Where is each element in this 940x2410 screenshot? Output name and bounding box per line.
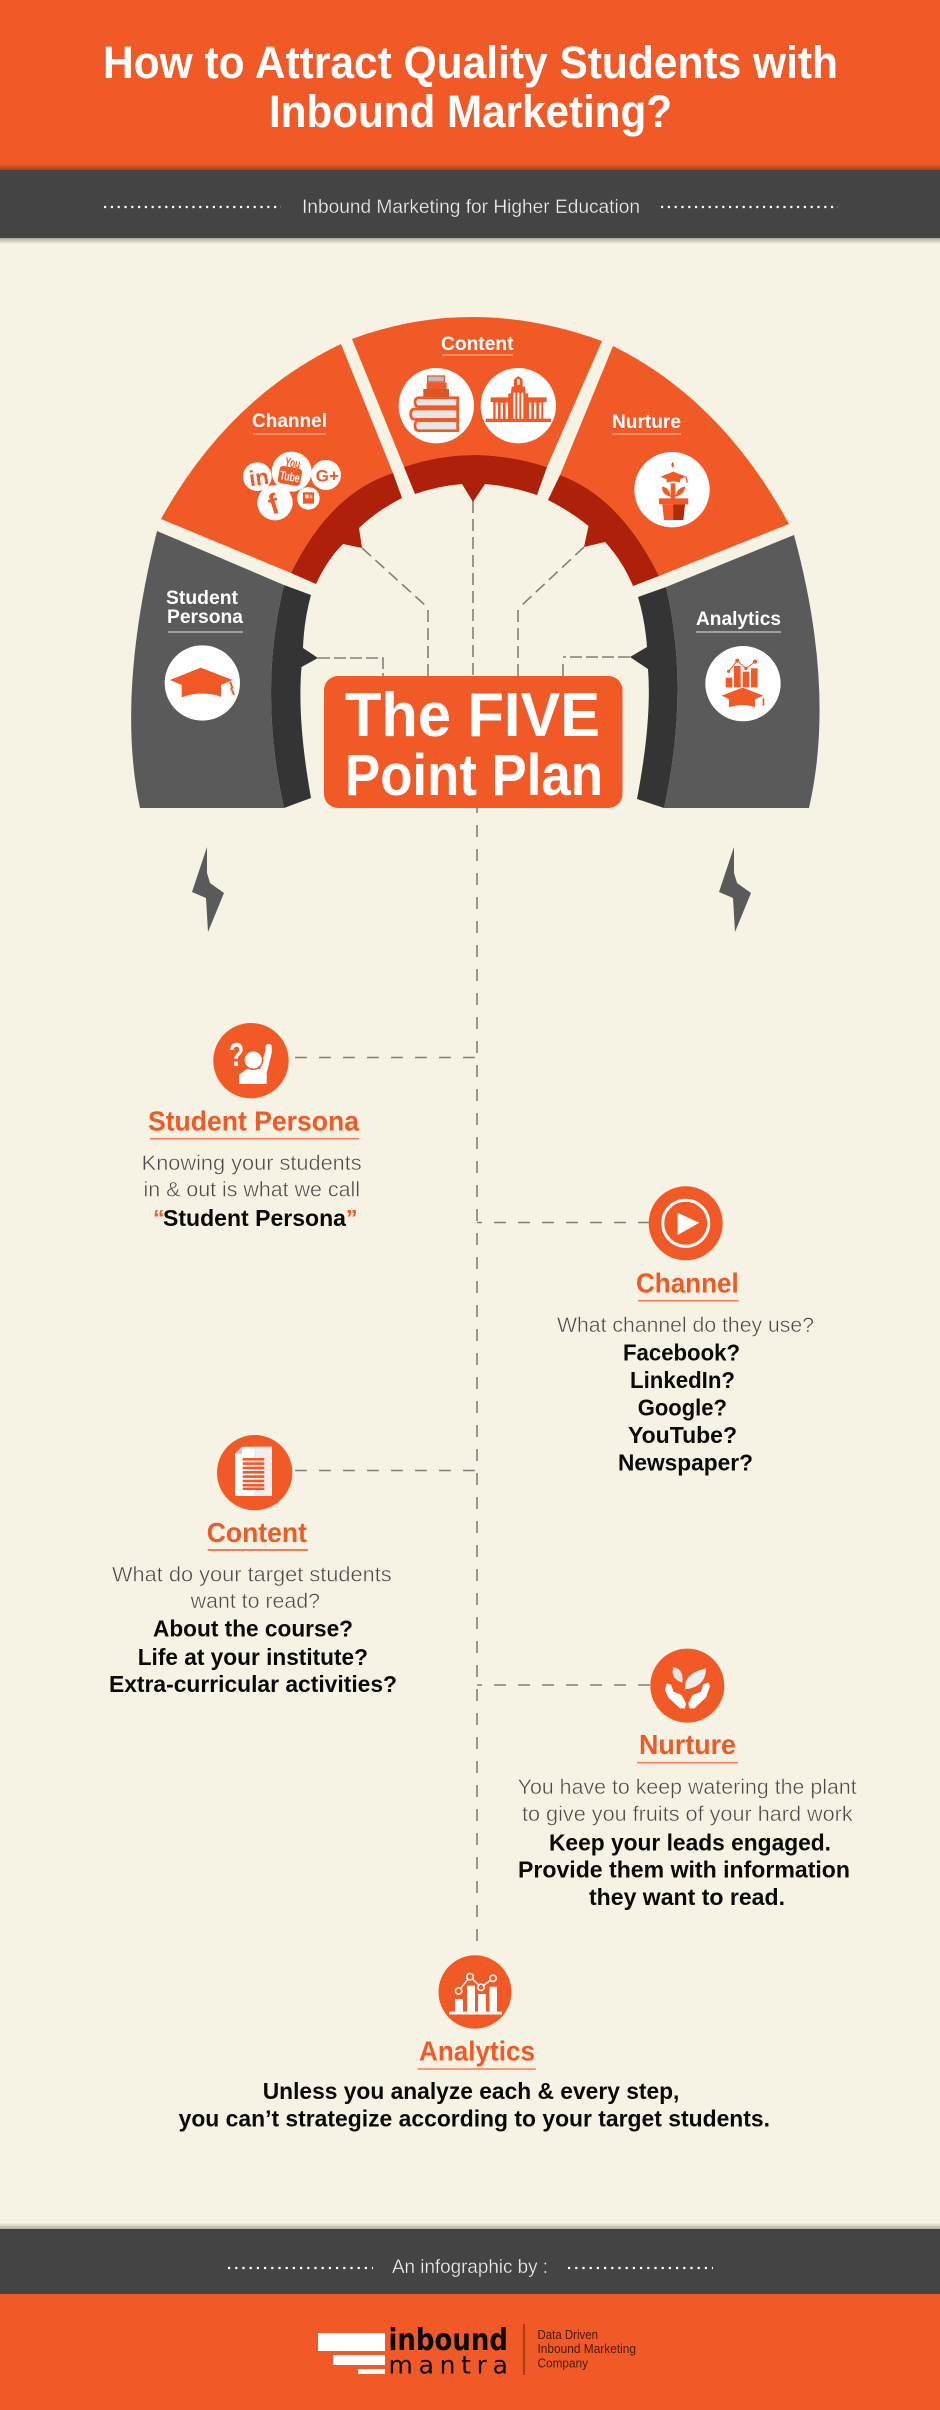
icon: graduation cap (165, 645, 240, 721)
text: content description: want to read? (190, 1590, 320, 1613)
tagline: Company (538, 2356, 588, 2370)
tagline: Data Driven (538, 2327, 598, 2342)
connector dashes: arch to plan box (318, 501, 630, 676)
text: nurture description: Keep your leads engaged. (549, 1830, 831, 1856)
text: student persona description: in & out is what we call (144, 1179, 360, 1202)
text: content description: What do your target students (112, 1564, 392, 1587)
text: channel description: YouTube? (628, 1422, 737, 1448)
credit bar: An infographic by : (392, 2256, 548, 2278)
logo: inbound mantra: inbound (388, 2323, 508, 2358)
subtitle bar (0, 170, 940, 244)
heading: student persona: Student Persona (148, 1106, 359, 1136)
text: content description: Extra-curricular activities? (109, 1671, 397, 1697)
icon: hands holding leaves (650, 1649, 724, 1723)
icon: student raising hand (213, 1023, 289, 1098)
segment label: channel: Channel (252, 411, 327, 432)
segment label: student persona (166, 588, 243, 632)
text: student persona description (142, 1152, 362, 1231)
segment label: analytics: Analytics (696, 609, 781, 630)
segment label: student persona: Student (166, 588, 239, 609)
heading: analytics: Analytics (419, 2036, 535, 2067)
text: channel description: Facebook? (623, 1340, 740, 1366)
panel: channel (557, 1186, 814, 1476)
icon: document (217, 1435, 292, 1510)
icon: play button (649, 1186, 723, 1260)
icon: stack of books (399, 368, 474, 443)
text: nurture description: to give you fruits of your hard work (522, 1803, 853, 1826)
logo: inbound mantra (318, 2323, 508, 2379)
footer (0, 2294, 940, 2410)
text: analytics description: Unless you analyze each & every step, (263, 2078, 679, 2104)
text: channel description: Google? (638, 1395, 727, 1421)
segment label: nurture: Nurture (612, 412, 681, 433)
icon: social media bubbles (243, 452, 341, 522)
icon: university building (481, 368, 556, 443)
heading: content: Content (207, 1517, 307, 1548)
text: student persona description: Student Persona (163, 1205, 346, 1231)
logo: inbound mantra: mantra (388, 2350, 508, 2379)
text: content description (109, 1564, 397, 1697)
text: content description: About the course? (153, 1616, 353, 1642)
text: student persona description: “ (153, 1205, 164, 1231)
panel: channel segment (161, 344, 402, 584)
subtitle bar: Inbound Marketing for Higher Education (302, 197, 640, 218)
panel: content (109, 1435, 397, 1697)
segment label: content: Content (441, 334, 514, 355)
icon: student raising hand: ? (229, 1036, 244, 1073)
icon: analytics chart and cap (705, 646, 781, 721)
lightning bolt right (719, 847, 751, 932)
text: channel description: LinkedIn? (630, 1367, 735, 1393)
panel: content segment (352, 317, 602, 502)
plan box (324, 676, 622, 808)
title (103, 37, 838, 137)
timeline connectors (295, 808, 650, 1942)
header banner (0, 0, 940, 170)
text: channel description (557, 1314, 814, 1476)
icon: social media bubbles: in (248, 464, 270, 491)
text: analytics description: you can’t strategize according to your target students. (179, 2106, 770, 2132)
heading: nurture: Nurture (639, 1729, 736, 1760)
icon: social media bubbles: Tube (279, 468, 301, 486)
text: student persona description: ” (346, 1205, 358, 1231)
icon: social media bubbles: You (284, 454, 302, 472)
panel: analytics (179, 1955, 770, 2132)
panel: analytics segment (630, 535, 820, 808)
plan box: Point Plan (345, 743, 603, 808)
text: channel description: Newspaper? (618, 1450, 753, 1476)
arch diagram: five point plan (131, 317, 820, 808)
lightning bolt left (192, 847, 224, 932)
text: nurture description (518, 1776, 857, 1910)
plan box: The FIVE (345, 681, 600, 750)
panel: student persona segment (131, 531, 318, 808)
text: nurture description: they want to read. (589, 1884, 785, 1910)
text: nurture description: Provide them with information (518, 1857, 850, 1883)
icon: bar and line chart (438, 1955, 512, 2029)
credit bar (0, 2223, 940, 2294)
tagline (538, 2327, 636, 2370)
text: channel description: What channel do they use? (557, 1314, 814, 1337)
panel: nurture segment (548, 346, 789, 586)
title: Inbound Marketing? (269, 86, 672, 137)
text: analytics description (179, 2078, 770, 2132)
text: nurture description: You have to keep watering the plant (518, 1776, 857, 1799)
text: content description: Life at your institute? (138, 1644, 368, 1670)
heading: channel: Channel (636, 1268, 739, 1299)
tagline: Inbound Marketing (538, 2341, 636, 2356)
segment label: student persona: Persona (167, 607, 243, 628)
icon: social media bubbles: f (264, 488, 284, 522)
icon: social media bubbles: G+ (316, 466, 339, 485)
panel: student persona (142, 1023, 362, 1231)
panel: nurture (518, 1649, 857, 1910)
icon: plant in pot (634, 452, 710, 527)
text: student persona description: Knowing your students (142, 1152, 362, 1175)
title: How to Attract Quality Students with (103, 37, 838, 88)
